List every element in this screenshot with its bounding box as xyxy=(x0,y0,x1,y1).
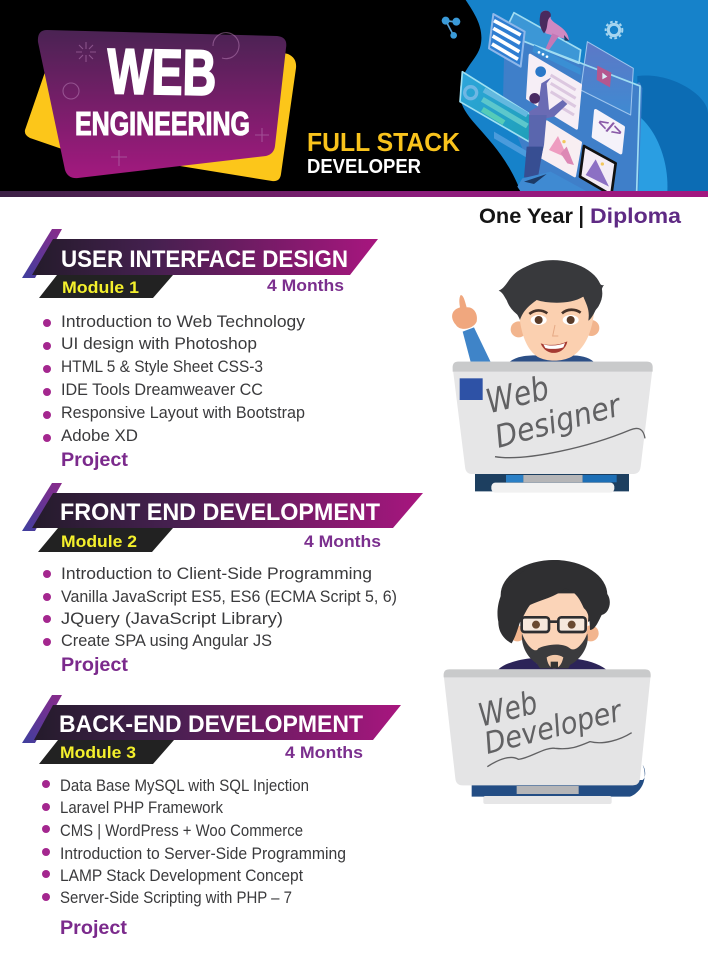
heading: ENGINEERING: ENGINEERING xyxy=(75,105,250,142)
icon: share nodes xyxy=(442,17,460,39)
banner accent xyxy=(22,695,62,743)
duration: 4 Months xyxy=(285,743,363,762)
nose xyxy=(553,325,558,336)
heading: USER INTERFACE DESIGN xyxy=(61,246,348,273)
module label: Module 3 xyxy=(60,743,136,762)
monitor: Developer xyxy=(481,694,627,762)
duration label: One Year xyxy=(479,205,573,228)
code card xyxy=(593,111,625,153)
banner xyxy=(32,493,423,528)
topic list: Adobe XD xyxy=(61,427,138,445)
head xyxy=(499,260,604,361)
icon: gear xyxy=(606,22,622,38)
shirt xyxy=(509,355,594,362)
monitor text: Web xyxy=(474,683,541,734)
heading: FRONT END DEVELOPMENT xyxy=(60,499,380,526)
monitor xyxy=(444,669,651,804)
banner xyxy=(32,239,378,275)
person man xyxy=(517,77,587,192)
shirt xyxy=(498,658,606,669)
person woman xyxy=(540,11,569,50)
banner xyxy=(34,705,401,740)
sticky note xyxy=(460,378,483,400)
character: web developer xyxy=(444,560,651,804)
head xyxy=(497,560,610,668)
heading: BACK-END DEVELOPMENT xyxy=(59,711,363,738)
panel: module 3 xyxy=(22,695,401,939)
heading: WEB: WEB xyxy=(107,35,217,109)
module label: Module 2 xyxy=(61,532,137,551)
topic list: HTML 5 & Style Sheet CSS-3 xyxy=(61,358,263,376)
image card pink xyxy=(541,122,581,176)
module tag xyxy=(38,528,173,552)
module tag xyxy=(39,275,173,298)
duration label: Diploma xyxy=(590,205,681,228)
topic list: Introduction to Server-Side Programming xyxy=(60,845,346,863)
hair xyxy=(499,260,604,321)
header rule xyxy=(0,191,708,197)
module label: Module 1 xyxy=(62,278,139,297)
hair back xyxy=(501,560,607,630)
topic list: CMS | WordPress + Woo Commerce xyxy=(60,822,303,840)
subtitle: full stack: FULL STACK xyxy=(307,129,461,157)
project label: Project xyxy=(61,654,129,676)
topic list: Server-Side Scripting with PHP – 7 xyxy=(60,889,292,907)
content card xyxy=(527,45,581,128)
mouth xyxy=(541,341,567,353)
topic list xyxy=(42,777,346,907)
header: black banner xyxy=(0,0,708,191)
title card xyxy=(25,30,296,181)
module tag xyxy=(39,740,174,764)
image card dark xyxy=(580,146,616,195)
project label: Project xyxy=(61,449,129,471)
topic list: Responsive Layout with Bootstrap xyxy=(61,404,305,422)
glasses xyxy=(522,617,586,632)
topic list xyxy=(43,313,306,445)
banner accent xyxy=(22,483,62,531)
panel: module 1 xyxy=(22,229,378,471)
topic list: Create SPA using Angular JS xyxy=(61,632,272,650)
hair back xyxy=(506,261,602,326)
panel: module 2 xyxy=(22,483,423,676)
decorative sparkles xyxy=(63,33,269,166)
topic list: IDE Tools Dreamweaver CC xyxy=(61,381,263,399)
monitor xyxy=(453,362,653,493)
hair xyxy=(497,560,610,643)
duration: 4 Months xyxy=(304,532,381,551)
settings card xyxy=(460,72,534,160)
raised arm xyxy=(452,295,491,362)
topic list: JQuery (JavaScript Library) xyxy=(61,610,283,628)
duration label xyxy=(479,205,681,228)
topic list: Introduction to Client-Side Programming xyxy=(61,565,372,583)
topic list: LAMP Stack Development Concept xyxy=(60,867,303,885)
yellow back card xyxy=(25,50,296,181)
topic list: UI design with Photoshop xyxy=(61,335,257,353)
header illustration: web interface on blue background xyxy=(442,0,708,195)
beard xyxy=(522,633,588,668)
topic list: Introduction to Web Technology xyxy=(61,313,306,331)
monitor: Designer xyxy=(491,387,626,456)
list card xyxy=(489,14,525,67)
topic list: Vanilla JavaScript ES5, ES6 (ECMA Script 5, 6) xyxy=(61,588,397,606)
purple front card xyxy=(38,30,286,178)
code card: </> xyxy=(594,114,625,141)
subtitle: developer: DEVELOPER xyxy=(307,156,422,178)
banner accent xyxy=(22,229,62,278)
eyes xyxy=(531,315,547,325)
monitor text: Web xyxy=(482,368,553,421)
topic list xyxy=(43,565,397,650)
topic list: Data Base MySQL with SQL Injection xyxy=(60,777,309,795)
duration: 4 Months xyxy=(267,276,344,295)
topic list: Laravel PHP Framework xyxy=(60,799,224,817)
character: web designer xyxy=(452,260,653,493)
project label: Project xyxy=(60,917,128,939)
